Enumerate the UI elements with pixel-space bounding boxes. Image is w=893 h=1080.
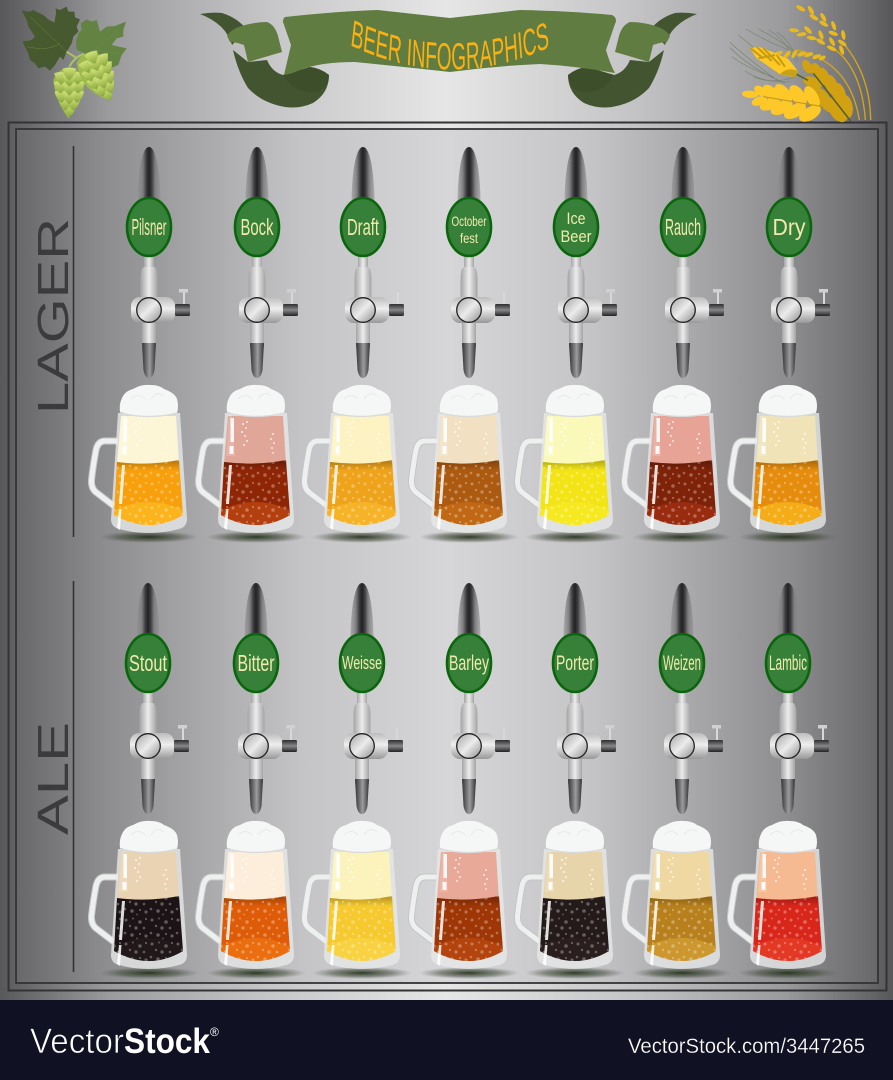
tap: Ice Beer: Beer (560, 227, 592, 246)
tap: Porter: Porter (556, 652, 594, 675)
tap: Dry (767, 147, 830, 378)
tap: Lambic: Lambic (769, 652, 807, 675)
mug: Weizen (624, 821, 732, 979)
footer bar (0, 1000, 893, 1080)
mug: Dry (730, 385, 838, 543)
tap: Weizen: Weizen (663, 652, 701, 675)
banner left tail (200, 13, 329, 108)
wheat awns (730, 29, 798, 83)
tap: Lambic (766, 583, 829, 814)
icon: hops (22, 7, 127, 118)
footer url: VectorStock.com/3447265 (628, 1035, 865, 1058)
tap: Dry: Dry (772, 214, 806, 240)
banner main band (283, 10, 616, 75)
mug: Draft (304, 385, 412, 543)
tap: Stout: Stout (129, 650, 167, 676)
banner ribbon (200, 10, 697, 108)
tap: Pilsner: Pilsner (132, 214, 167, 240)
tap: Weizen (660, 583, 723, 814)
tap: Draft: Draft (347, 214, 379, 240)
dark wheat ear (800, 58, 855, 126)
tap: Bock: Bock (240, 214, 274, 240)
mug: Ice Beer (517, 385, 625, 543)
tap: Bitter: Bitter (238, 650, 275, 676)
tap: Porter (553, 583, 616, 814)
tap: Bock (235, 147, 298, 378)
mug: October fest (411, 385, 519, 543)
mug: Barley (411, 821, 519, 979)
ale row (91, 583, 838, 979)
tap: Draft (341, 147, 404, 378)
mug: Lambic (730, 821, 838, 979)
tap: Stout (126, 583, 189, 814)
tap: Weisse: Weisse (342, 653, 382, 673)
mug: Stout (91, 821, 199, 979)
mug: Rauch (624, 385, 732, 543)
tap: October fest (447, 147, 510, 378)
banner right tail (568, 13, 697, 108)
footer logo: VectorStock (30, 1022, 219, 1061)
tap: October fest: fest (460, 230, 478, 246)
upper wheat ear (750, 47, 798, 77)
tap: Ice Beer: Ice (566, 209, 586, 228)
mug: Weisse (304, 821, 412, 979)
section heading: ALE: ALE (29, 722, 78, 835)
tap: Bitter (234, 583, 297, 814)
icon: wheat (730, 4, 871, 126)
lager row (91, 147, 838, 543)
tap: Ice Beer (554, 147, 617, 378)
tap: Barley (447, 583, 510, 814)
bright wheat ear (742, 81, 824, 125)
title: BEER INFOGRAPHICS (352, 20, 548, 70)
tap: Rauch (661, 147, 724, 378)
mug: Pilsner (91, 385, 199, 543)
frame panel (8, 122, 886, 990)
tap: October fest: October (452, 213, 487, 229)
tap: Rauch: Rauch (665, 214, 701, 240)
tap: Weisse (340, 583, 403, 814)
mug: Bock (198, 385, 306, 543)
mug: Porter (517, 821, 625, 979)
tap: Barley: Barley (449, 652, 489, 675)
footer logo: ® (210, 1025, 219, 1039)
mug: Bitter (198, 821, 306, 979)
tap: Pilsner (127, 147, 190, 378)
section heading: LAGER: LAGER (29, 218, 78, 414)
